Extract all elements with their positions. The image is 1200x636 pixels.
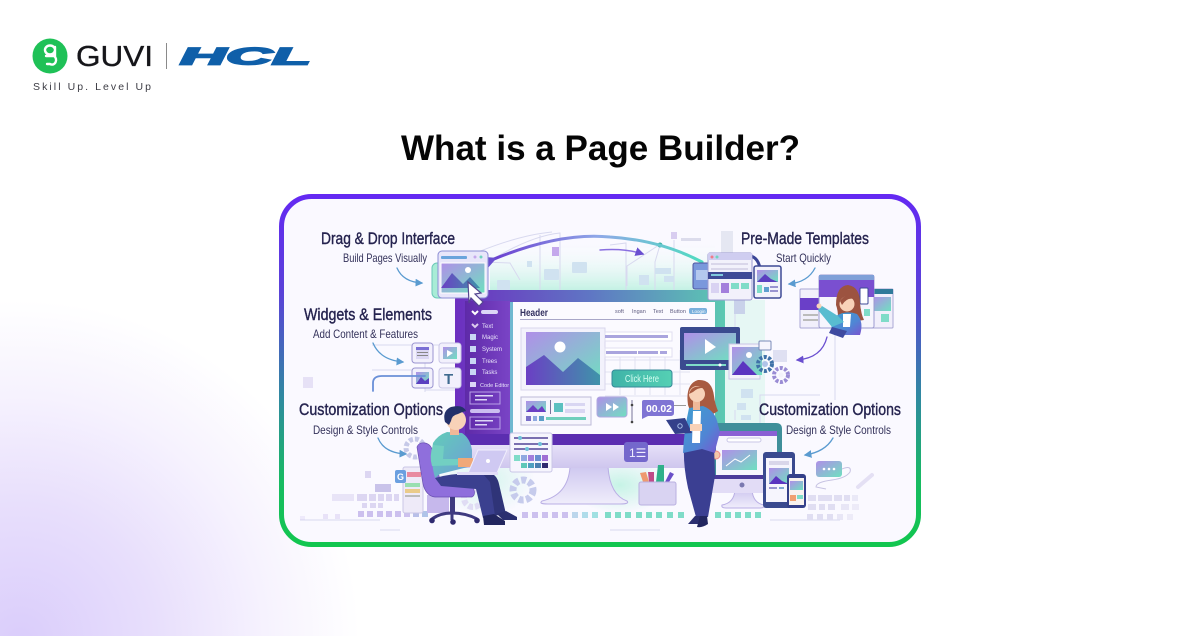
widget icons: T [444,371,453,388]
sidebar: Code Editor [480,383,509,389]
label: Widgets & Elements: Add Content & Features [313,327,418,341]
image card with gears [729,341,788,382]
drag card with cursor [432,251,488,306]
header bar: Ingan [632,309,646,315]
wordmark: GUVI: GUVI [76,41,153,73]
face [840,296,854,312]
sidebar: Tasks [482,370,497,376]
hair [836,285,864,322]
sidebar: System [482,347,502,353]
blazer [831,312,861,335]
label: Widgets & Elements: Widgets & Elements [304,305,432,324]
pants [684,445,715,517]
skip button [597,397,633,423]
woman presenting templates [800,275,893,338]
button: Click Here: Click Here [625,374,659,385]
hero image placeholder [521,328,605,390]
shoes [688,516,702,524]
header bar: Loogin [692,309,706,314]
monitor bezel [455,290,725,445]
header bar: Button [670,309,686,315]
man seated with laptop [417,406,517,525]
sidebar [465,301,513,434]
logo badge on chin [624,442,648,462]
big arc arrows [494,236,702,262]
hair [444,406,466,425]
front leg [435,474,495,518]
sidebar: Trees [482,359,497,365]
button: Click Here [612,370,672,387]
phones [763,452,806,508]
media block [521,397,591,425]
sidebar: Magic [482,335,498,341]
neck [450,427,459,435]
monitor chin [455,445,725,468]
template cluster [693,253,781,300]
header bar: Header [520,308,548,319]
woman with tablet [666,380,720,527]
monitor [455,290,725,504]
chat bubble [816,461,872,489]
gear large [758,357,772,371]
video card [680,327,740,370]
second monitor [710,423,782,508]
title: What is a Page Builder? [401,128,800,168]
text lines [605,332,672,357]
back leg [470,473,506,516]
laptop [457,450,507,475]
background circuitry and glow [300,231,840,530]
label: Customization Options left: Design & Style Controls [313,423,418,437]
label: Drag & Drop Interface: Drag & Drop Interface [321,229,455,248]
timer badge [642,400,686,419]
blazer [683,406,720,453]
arm [431,445,466,466]
header bar [520,308,708,320]
label: Customization Options right: Customization Options [759,400,901,419]
monitor stand [541,467,628,504]
shoes [483,514,505,525]
label: Pre-Made Templates: Pre-Made Templates [741,229,869,248]
panel: page builder illustration [282,196,918,544]
timer badge: 00.02 [646,403,672,415]
icon: GUVI green circle [32,38,68,74]
pen holder [639,465,676,505]
label: Pre-Made Templates [741,229,869,265]
blouse [692,411,701,443]
logo: GUVI and HCL [32,38,311,93]
neck [693,401,700,410]
bottom pixel trail [300,471,859,520]
sidebar: Text [482,324,493,330]
label: Pre-Made Templates: Start Quickly [776,251,831,265]
label: Customization Options left [299,400,443,437]
label: Customization Options right [759,400,901,437]
header bar: Text [653,309,664,315]
screen [513,302,715,434]
head [446,410,466,430]
wireframe grid [605,350,715,396]
left gear and form card [395,439,449,513]
card frame [282,196,918,544]
header bar: soft [615,309,624,315]
label: Drag & Drop Interface [321,229,455,265]
label: Customization Options left: Customization Options [299,400,443,419]
label: Drag & Drop Interface: Build Pages Visually [343,251,427,265]
tablet [666,418,692,434]
label: Widgets & Elements [304,305,432,341]
widget icons [412,343,461,388]
label: Customization Options right: Design & Style Controls [786,423,891,437]
slider panel [510,433,552,472]
gear near chair [464,480,533,507]
arm [818,306,844,327]
gear small [774,368,788,382]
logo badge on chin: 1☰ [629,446,646,460]
tagline: Skill Up. Level Up [33,81,151,93]
left gear and form card: G [397,472,404,482]
callout arrows [373,268,833,455]
small background icons [303,231,753,420]
wordmark: HCL: HCL [180,44,311,70]
face [689,386,705,402]
torso [432,432,472,478]
chair [417,443,480,525]
hair [687,380,718,416]
